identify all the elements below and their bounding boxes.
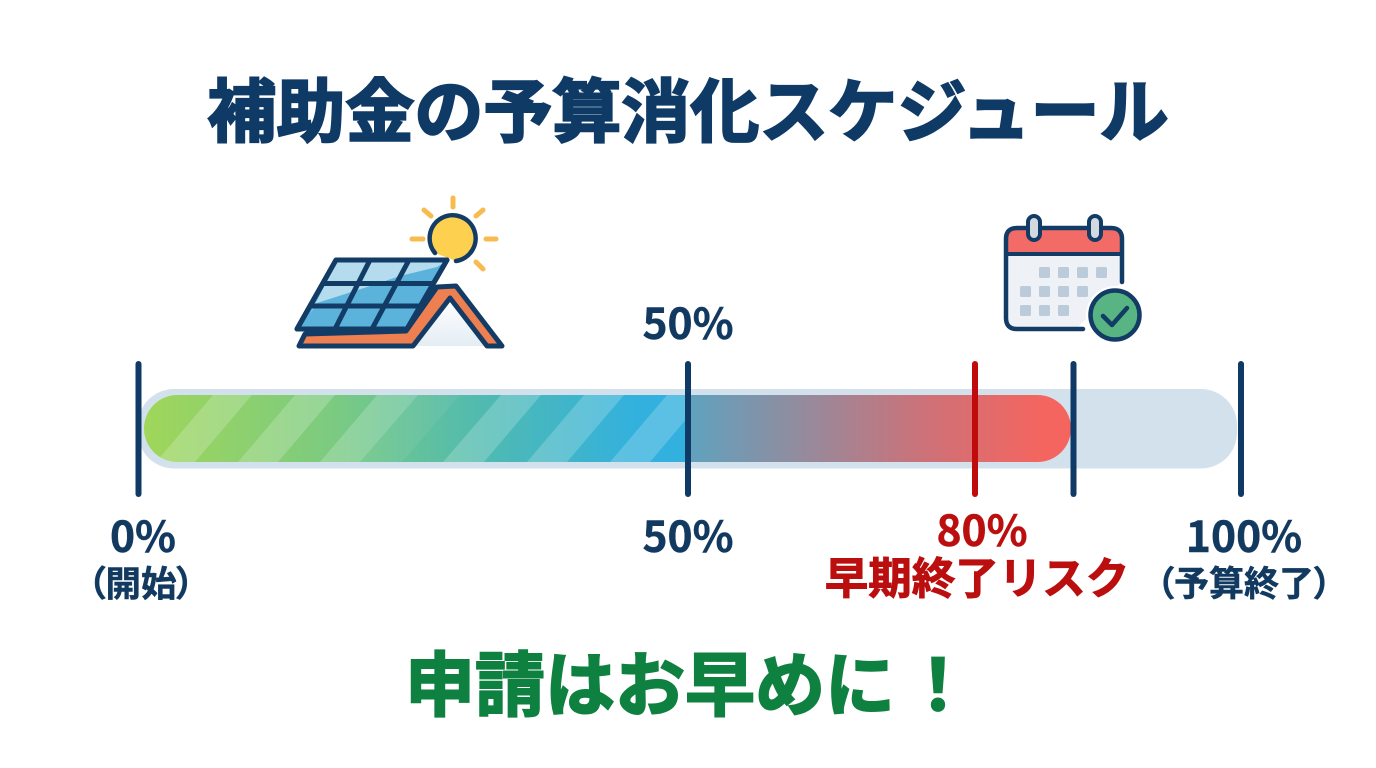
label: 0% start: 0% [110,504,176,565]
tick: 0% [136,361,142,497]
label: 100% budget end [1156,504,1332,607]
label: 100% budget end: 100% [1186,504,1302,565]
icon: calendar with check [1006,216,1144,344]
label: 80% early end risk [825,498,1129,607]
icon: house roof [299,286,502,346]
label: 80% early end risk: 早期終了リスク [825,544,1129,607]
title: 補助金の予算消化スケジュール [207,56,1169,156]
tick: 80% [972,361,978,497]
call to action: 申請はお早めに！ [405,630,973,731]
label: 50% above bar: 50% [642,291,734,352]
icon: solar panel [297,260,447,329]
label: 0% start: （開始） [88,556,194,607]
calendar date squares [1020,267,1107,316]
label: 80% early end risk: 80% [936,498,1028,559]
icon: sun [412,198,496,270]
label: 0% start [88,504,194,607]
label: 50% below bar: 50% [642,504,734,565]
calendar body [1006,254,1122,330]
bar gradient fill [144,395,1071,462]
icon: solar panel roof with sun [297,198,502,346]
tick: 100% [1238,361,1244,497]
bar track [138,389,1237,468]
tick: 50% [685,361,691,497]
label: 100% budget end: （予算終了） [1156,556,1332,607]
icon: check badge [1086,286,1144,344]
tick: current [1070,361,1076,497]
progress bar [136,361,1244,497]
calendar rings [1028,216,1101,240]
